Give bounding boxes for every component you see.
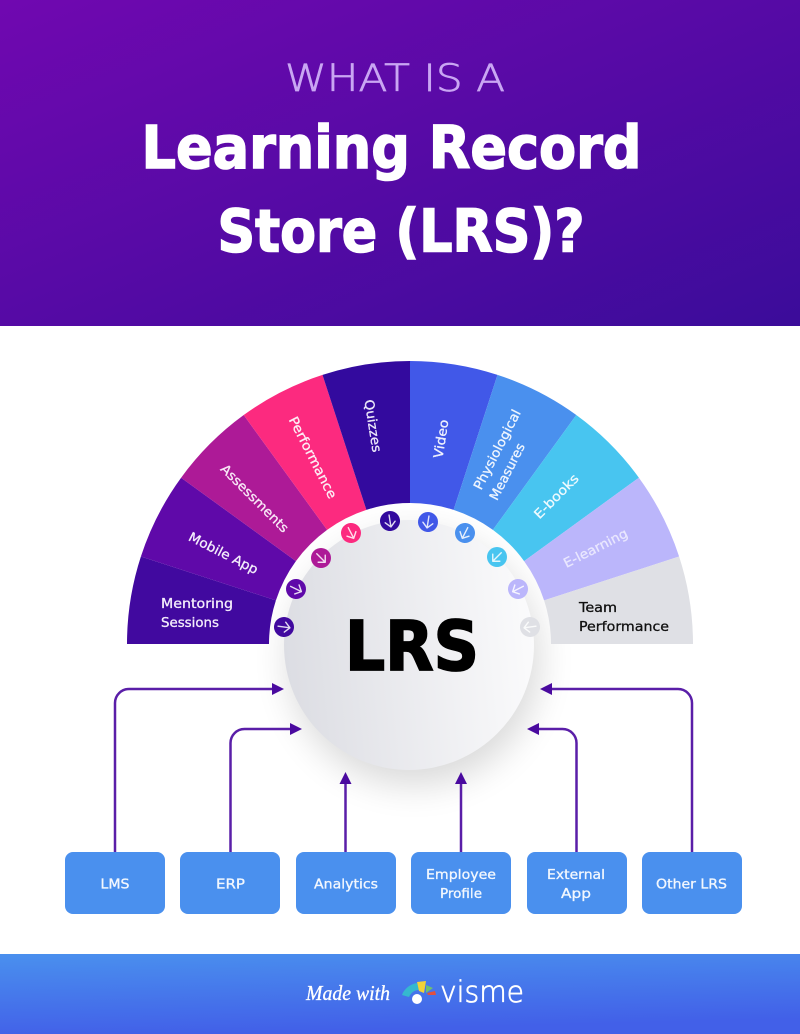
box: Analytics [296,852,396,914]
sector: E-books: E-books [532,471,583,522]
sector: Team Performance: Performance [579,620,669,635]
eyebrow: what is a: WHAT IS A [285,57,505,100]
box: External App [527,852,627,914]
badge: E-learning [505,576,531,602]
sector: Mobile App [141,478,296,600]
footer credit [305,975,524,1009]
sector: E-books [493,415,639,561]
badge: Physiological Measures [452,520,478,546]
sector: Video [410,361,498,510]
box: Other LRS: Other LRS [656,878,727,892]
sector: Video: Video [432,419,452,459]
LRS label: LRS [345,607,479,687]
badge: Quizzes [379,510,401,532]
sector: E-learning: E-learning [561,526,631,572]
heading line 2: Store (LRS)? [218,196,584,266]
sector: Mobile App: Mobile App [186,530,260,578]
sector: E-learning [524,478,679,600]
box: ERP: ERP [216,878,245,892]
arrow badges [273,510,541,638]
badge: E-books [483,543,511,571]
sector: Performance: Performance [285,414,339,502]
central circle shadow [289,535,539,785]
sector: Assessments: Assessments [217,462,291,536]
box: Other LRS [642,852,742,914]
arrow: Employee Profile [455,772,467,852]
badge: Video [417,511,439,533]
box: LMS [65,852,165,914]
connector arrows [115,683,692,852]
badge: Mobile App [283,576,309,602]
made with text: Made with [305,981,390,1005]
box: Employee Profile: Profile [440,887,482,902]
box: External App: App [561,887,591,902]
fan diagram [127,361,693,644]
arrow: LMS [115,683,284,852]
sector: Mentoring Sessions [127,556,276,644]
arrow: Analytics [340,772,352,852]
arrow: ERP [230,723,302,852]
sector: Team Performance [544,556,693,644]
box: LMS: LMS [100,878,130,892]
sector: Physiological Measures [454,375,576,530]
badge: Assessments [307,544,335,572]
badge: Team Performance [519,616,541,638]
box: External App: External [547,868,605,883]
heading line 1: Learning Record [142,113,642,182]
sector: Team Performance: Team [578,601,617,616]
header banner [0,0,800,326]
sector: Mentoring Sessions: Mentoring [161,597,233,612]
footer banner [0,954,800,1034]
icon: visme logo [402,981,436,1004]
source boxes [65,852,742,914]
sector: Physiological Measures: Measures [487,441,529,503]
sector: Mentoring Sessions: Sessions [161,616,219,631]
badge: Performance [338,520,364,546]
box: Employee Profile [411,852,511,914]
box: Analytics: Analytics [314,878,378,892]
sector: Performance [244,375,366,530]
visme wordmark: visme [440,975,524,1009]
arrow: External App [527,723,576,852]
sector: Assessments [181,415,327,561]
box: Employee Profile: Employee [426,868,496,883]
title [142,57,642,266]
arrow: Other LRS [540,683,692,852]
badge: Mentoring Sessions [273,616,295,638]
sector: Quizzes [322,361,410,510]
sector: Physiological Measures: Physiological [471,407,525,493]
box: ERP [180,852,280,914]
sector: Quizzes: Quizzes [360,399,384,454]
central LRS circle [284,520,534,770]
